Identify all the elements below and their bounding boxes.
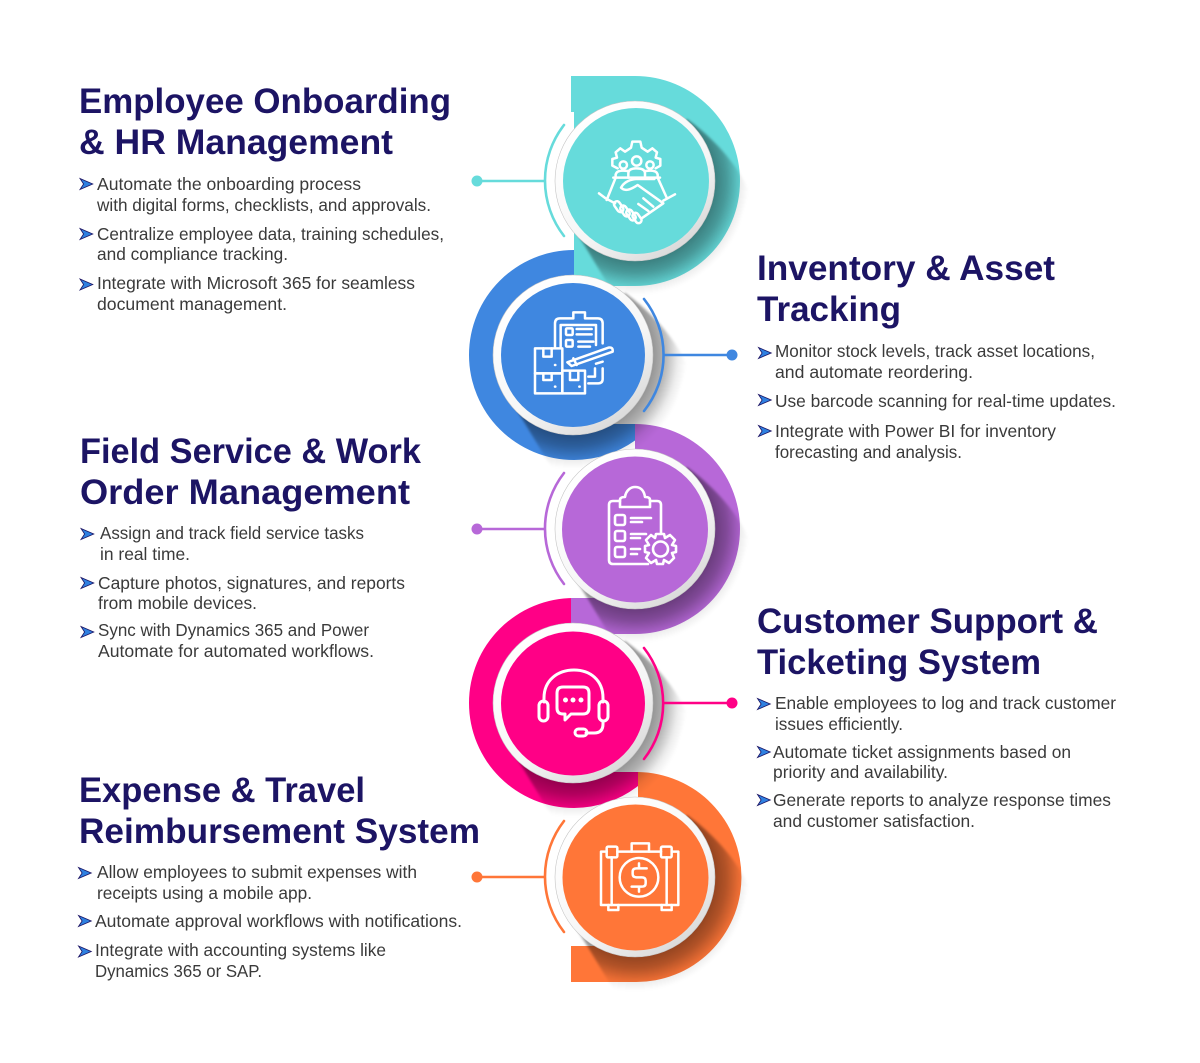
bullets: expense and travel: Dynamics 365 or SAP.	[95, 961, 262, 981]
section: customer support	[757, 602, 1116, 831]
bullets: employee onboarding: Automate the onboarding process	[97, 174, 361, 194]
bullets: employee onboarding: Centralize employee data, training schedules,	[97, 224, 444, 244]
heading: employee onboarding: & HR Management	[79, 123, 393, 162]
bullets: field service: Automate for automated workflows.	[98, 641, 374, 661]
bullets: employee onboarding: and compliance tracking.	[97, 244, 288, 264]
disc: purple	[571, 424, 740, 634]
bullets: customer support: Automate ticket assignments based on	[773, 742, 1071, 762]
bullets: inventory tracking: Use barcode scanning for real-time updates.	[775, 391, 1116, 411]
step: purple circle	[555, 449, 749, 647]
disc: blue	[469, 250, 635, 460]
bullets: customer support: Generate reports to analyze response times	[773, 790, 1111, 810]
step: pink circle	[493, 623, 687, 821]
bullets: expense and travel: Integrate with accounting systems like	[95, 940, 386, 960]
icon: handshake and team gear	[599, 142, 675, 224]
icon: briefcase with dollar	[601, 843, 678, 910]
connector: pink	[644, 648, 738, 759]
bullets: employee onboarding	[80, 174, 444, 314]
heading: customer support	[757, 602, 1098, 682]
heading: expense and travel: Reimbursement System	[79, 812, 480, 851]
bullets: customer support: and customer satisfaction.	[773, 811, 975, 831]
connector: teal	[472, 125, 564, 236]
heading: employee onboarding	[79, 82, 451, 162]
bullets: customer support: priority and availability.	[773, 762, 948, 782]
bullets: inventory tracking: Integrate with Power BI for inventory	[775, 421, 1056, 441]
connector: orange	[472, 821, 564, 932]
section: field service	[80, 432, 422, 661]
bullets: inventory tracking: and automate reordering.	[775, 362, 973, 382]
connector: blue	[644, 299, 738, 411]
bullets: customer support: issues efficiently.	[775, 714, 903, 734]
heading: customer support: Customer Support &	[757, 602, 1098, 641]
heading: field service: Field Service & Work	[80, 432, 422, 471]
bullets: employee onboarding: with digital forms, checklists, and approvals.	[96, 195, 431, 215]
icon: clipboard and boxes	[535, 312, 613, 393]
heading: customer support: Ticketing System	[757, 643, 1041, 682]
heading: field service	[80, 432, 422, 512]
bullets: field service: Capture photos, signatures, and reports	[98, 573, 405, 593]
step: orange circle	[555, 797, 749, 995]
bullets: inventory tracking	[758, 341, 1116, 462]
bullets: expense and travel: Automate approval workflows with notifications.	[95, 911, 462, 931]
bullets: customer support	[758, 693, 1116, 831]
icon: support headset	[539, 670, 608, 736]
heading: expense and travel	[79, 771, 480, 851]
section: inventory tracking	[757, 249, 1116, 462]
heading: expense and travel: Expense & Travel	[79, 771, 365, 810]
disc: orange	[571, 772, 741, 982]
disc: pink	[469, 598, 638, 808]
bullets: expense and travel: receipts using a mobile app.	[97, 883, 312, 903]
heading: inventory tracking: Tracking	[757, 290, 901, 329]
section: expense and travel	[78, 771, 480, 981]
heading: inventory tracking	[757, 249, 1055, 329]
heading: field service: Order Management	[80, 473, 410, 512]
section: employee onboarding	[79, 82, 451, 314]
step: teal circle	[555, 101, 749, 299]
heading: inventory tracking: Inventory & Asset	[757, 249, 1055, 288]
bullets: employee onboarding: document management.	[97, 294, 287, 314]
bullets: expense and travel: Allow employees to submit expenses with	[97, 862, 417, 882]
heading: employee onboarding: Employee Onboarding	[79, 82, 451, 121]
bullets: field service: from mobile devices.	[98, 593, 257, 613]
disc: teal	[571, 76, 740, 286]
bullets: employee onboarding: Integrate with Microsoft 365 for seamless	[97, 273, 415, 293]
bullets: field service: Sync with Dynamics 365 and Power	[98, 620, 369, 640]
bullets: field service: Assign and track field service tasks	[100, 523, 364, 543]
connector: purple	[472, 473, 564, 584]
bullets: inventory tracking: Monitor stock levels, track asset locations,	[775, 341, 1095, 361]
bullets: customer support: Enable employees to log and track customer	[775, 693, 1116, 713]
bullets: expense and travel	[78, 862, 462, 981]
step: blue circle	[493, 275, 687, 473]
bullets: inventory tracking: forecasting and analysis.	[775, 442, 962, 462]
icon: checklist with gear	[609, 487, 676, 564]
bullets: field service	[81, 523, 405, 661]
bullets: field service: in real time.	[100, 544, 190, 564]
